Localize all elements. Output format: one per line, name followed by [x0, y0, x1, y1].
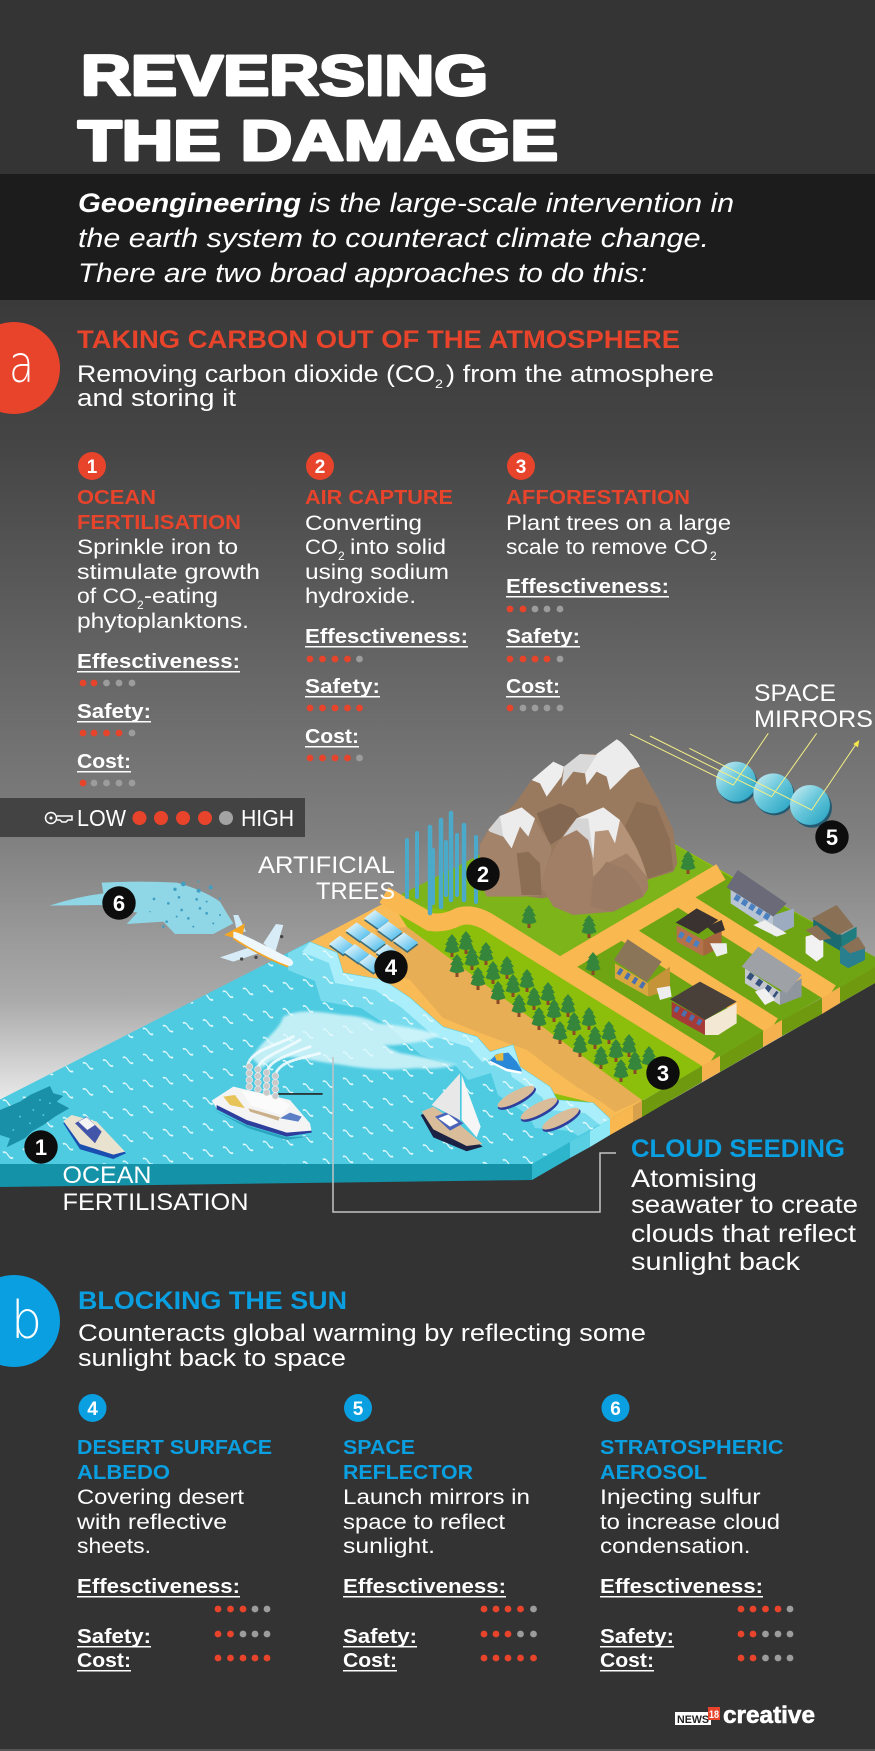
section a marker: [0, 322, 60, 414]
section a heading: Removing carbon dioxide (CO: [77, 361, 435, 388]
rating: effectiveness: [600, 1575, 793, 1612]
side faces: [532, 967, 875, 1180]
description: Injecting sulfur: [600, 1486, 761, 1509]
label: space mirrors: [754, 680, 873, 733]
jet ski: [489, 1053, 522, 1074]
badge 5: [344, 1394, 372, 1422]
rating: cost: [77, 750, 135, 786]
label: artificial trees: TREES: [316, 878, 395, 905]
illustration: space mirrors: [630, 733, 859, 828]
heading: STRATOSPHERIC: [600, 1436, 784, 1459]
section a heading: TAKING CARBON OUT OF THE ATMOSPHERE: [77, 326, 680, 354]
description: 2: [137, 598, 144, 612]
badge 5: 5: [353, 1399, 364, 1420]
illustration: forest: [444, 851, 696, 1082]
intro band: There are two broad approaches to do this:: [78, 258, 647, 288]
rating: cost: Cost:: [305, 725, 359, 748]
number badges on illustration: [24, 820, 849, 1164]
sand: [300, 900, 642, 1119]
logo: news18 creative: 18: [709, 1709, 719, 1721]
sailboat: [421, 1110, 483, 1151]
marker 4: 4: [385, 955, 398, 980]
panel: afforestation: [506, 452, 731, 711]
illustration: artificial trees: [407, 813, 476, 913]
mountain zone green: [390, 798, 721, 966]
label: artificial trees: [258, 852, 395, 905]
heading: [343, 1436, 473, 1484]
marker 5: 5: [826, 825, 838, 850]
rating: safety: [77, 1625, 270, 1648]
badge 6: 6: [610, 1399, 621, 1420]
rating: effectiveness: Effesctiveness:: [506, 575, 669, 598]
heading: DESERT SURFACE: [77, 1436, 272, 1459]
illustration: airplane: [220, 915, 293, 967]
house: yellow walls: [614, 939, 672, 1000]
darker sand strip: [375, 927, 642, 1112]
label: ocean fertilisation: FERTILISATION: [62, 1189, 248, 1216]
yacht: [63, 1117, 126, 1159]
badge 6: [602, 1394, 630, 1422]
logo: news18 creative: [675, 1702, 815, 1729]
isometric landscape base: [0, 798, 875, 1187]
description: of CO: [77, 585, 137, 608]
rating: safety: Safety:: [305, 675, 380, 698]
house: grey roof: [727, 870, 794, 937]
rating: effectiveness: Effesctiveness:: [77, 650, 240, 673]
rating: safety: [77, 700, 151, 736]
rating: effectiveness: Effesctiveness:: [600, 1575, 763, 1598]
logo: news18 creative: NEWS: [677, 1714, 709, 1726]
illustration: aerosol plume: [49, 881, 233, 934]
illustration: houses: [614, 870, 866, 1035]
description: space to reflect: [343, 1511, 505, 1534]
vapor trails: [248, 1037, 320, 1072]
land top surface: [0, 798, 875, 1164]
marker 1: [24, 1130, 58, 1164]
description: Covering desert: [77, 1486, 244, 1509]
ship shadow: [213, 1110, 312, 1140]
title: REVERSING: [81, 44, 488, 108]
rating: effectiveness: [77, 650, 240, 686]
section b heading: BLOCKING THE SUN: [78, 1287, 347, 1315]
description: Converting: [305, 512, 422, 535]
section b marker: b: [11, 1291, 42, 1351]
description: sunlight.: [343, 1535, 435, 1558]
intro band: is the large-scale intervention in: [309, 188, 734, 218]
house: red walls: [670, 982, 737, 1035]
badge 4: [78, 1394, 106, 1422]
section a heading: and storing it: [77, 385, 236, 412]
rating: effectiveness: Effesctiveness:: [343, 1575, 506, 1598]
rating: effectiveness: Effesctiveness:: [77, 1575, 240, 1598]
title: [78, 44, 558, 173]
description: using sodium: [305, 561, 449, 584]
panel: desert surface albedo: [76, 1394, 272, 1672]
description: hydroxide.: [305, 585, 416, 608]
rating: cost: Cost:: [600, 1649, 654, 1672]
rating: cost: Cost:: [77, 750, 131, 773]
legend: low to high: LOW: [77, 805, 126, 831]
rating: safety: Safety:: [77, 1625, 151, 1648]
rating: effectiveness: [77, 1575, 270, 1612]
marker 6: 6: [113, 891, 125, 916]
housing zone green: [561, 872, 875, 1061]
exhaust stacks: [246, 1063, 279, 1099]
description: to increase cloud: [600, 1511, 780, 1534]
heading: OCEAN: [77, 486, 156, 509]
heading: ALBEDO: [77, 1461, 170, 1484]
illustration: mountains: [479, 739, 677, 915]
marker 2: [466, 857, 500, 891]
marker 1: 1: [35, 1135, 47, 1160]
label: artificial trees: ARTIFICIAL: [258, 852, 395, 879]
rating: effectiveness: [506, 575, 669, 612]
description: condensation.: [600, 1535, 750, 1558]
description: -eating: [144, 585, 218, 608]
label: ocean fertilisation: [62, 1162, 248, 1216]
badge 2: [306, 452, 334, 480]
badge 3: [507, 452, 535, 480]
heading: AEROSOL: [600, 1461, 707, 1484]
heading: [600, 1436, 784, 1484]
description: phytoplanktons.: [77, 610, 249, 633]
section a heading: 2: [435, 377, 443, 391]
rating: safety: [600, 1625, 793, 1648]
ship hull: [212, 1087, 312, 1136]
section a marker: a: [9, 335, 34, 395]
rating: cost: Cost:: [506, 675, 560, 698]
marker 6: [102, 886, 136, 920]
shallow water: [288, 942, 610, 1136]
callout: cloud seeding: sunlight back: [631, 1248, 801, 1276]
marker 3: 3: [657, 1061, 669, 1086]
description: Sprinkle iron to: [77, 536, 238, 559]
title: THE DAMAGE: [78, 109, 558, 173]
label: space mirrors: MIRRORS: [754, 706, 873, 733]
badge 3: 3: [516, 457, 526, 478]
intro band: the earth system to counteract climate change.: [78, 223, 709, 253]
description: [77, 536, 260, 633]
panel: stratospheric aerosol: [600, 1394, 793, 1672]
badge 1: 1: [87, 457, 98, 478]
section a heading: ) from the atmosphere: [446, 361, 714, 388]
description: [76, 1486, 244, 1558]
callout: cloud seeding: clouds that reflect: [631, 1220, 856, 1248]
panel: ocean fertilisation: [77, 452, 260, 786]
rating: safety: [305, 675, 380, 711]
logo: news18 creative: creative: [723, 1702, 815, 1729]
heading: AFFORESTATION: [506, 486, 690, 509]
rating: cost: Cost:: [77, 1649, 131, 1672]
rating: cost: [343, 1649, 537, 1672]
illustration: desert albedo panels: [329, 910, 418, 975]
marker 4: [374, 950, 408, 984]
callout: cloud seeding: [631, 1135, 858, 1276]
description: with reflective: [76, 1511, 227, 1534]
heading: AIR CAPTURE: [305, 486, 453, 509]
heading: [77, 486, 241, 534]
legend: low to high: [0, 798, 305, 837]
description: sheets.: [77, 1535, 151, 1558]
label: space mirrors: SPACE: [754, 680, 836, 707]
description: [600, 1486, 780, 1558]
rating: cost: [305, 725, 363, 761]
label: ocean fertilisation: OCEAN: [62, 1162, 152, 1189]
rating: cost: [77, 1649, 270, 1672]
description: [506, 512, 731, 563]
badge 2: 2: [315, 457, 325, 478]
description: [305, 512, 449, 608]
heading: SPACE: [343, 1436, 415, 1459]
description: 2: [710, 549, 717, 563]
house: grey walls: [742, 947, 802, 1005]
cloud seeding connector: [333, 1057, 616, 1212]
panel: space reflector: [343, 1394, 537, 1672]
heading: [77, 1436, 272, 1484]
callout: cloud seeding: CLOUD SEEDING: [631, 1135, 845, 1163]
section b heading: sunlight back to space: [78, 1345, 346, 1372]
cloud plume: [252, 1011, 457, 1069]
badge 4: 4: [87, 1399, 98, 1420]
callout: cloud seeding: Atomising: [631, 1165, 757, 1193]
rating: effectiveness: [305, 625, 468, 662]
shoreline foam: [302, 942, 610, 1125]
heading: REFLECTOR: [343, 1461, 473, 1484]
rating: cost: Cost:: [343, 1649, 397, 1672]
illustration: iron fertilised patch: [0, 1086, 69, 1147]
wave texture: [0, 942, 610, 1164]
description: 2: [338, 549, 345, 563]
rowboats: [494, 1082, 539, 1114]
roads: [384, 872, 831, 1061]
legend: low to high: HIGH: [241, 805, 294, 831]
rating: safety: Safety:: [600, 1625, 674, 1648]
section b heading: Counteracts global warming by reflecting some: [78, 1320, 646, 1347]
description: scale to remove CO: [506, 536, 708, 559]
house: brown walls: [676, 908, 727, 957]
ocean: [0, 942, 610, 1164]
rating: safety: Safety:: [343, 1625, 417, 1648]
rating: safety: Safety:: [77, 700, 151, 723]
house: teal walls: [806, 905, 866, 968]
description: into solid: [350, 536, 446, 559]
intro band: [0, 174, 875, 300]
description: [343, 1486, 530, 1558]
description: Launch mirrors in: [343, 1486, 530, 1509]
intro band: Geoengineering: [78, 188, 302, 218]
panel: air capture: [305, 452, 468, 761]
badge 1: [78, 452, 106, 480]
front water face: [0, 1164, 532, 1187]
illustration: cloud seeding ship and clouds: [63, 1011, 583, 1159]
description: Plant trees on a large: [506, 512, 731, 535]
rating: effectiveness: [343, 1575, 537, 1612]
heading: FERTILISATION: [77, 511, 241, 534]
marker 5: [815, 820, 849, 854]
rating: safety: Safety:: [506, 625, 580, 648]
marker 2: 2: [477, 862, 489, 887]
section b marker: [0, 1275, 60, 1367]
description: stimulate growth: [77, 561, 260, 584]
rating: safety: [506, 625, 580, 662]
section a heading: [77, 326, 714, 412]
marker 3: [646, 1056, 680, 1090]
description: CO: [305, 536, 338, 559]
rating: effectiveness: Effesctiveness:: [305, 625, 468, 648]
rating: cost: [600, 1649, 793, 1672]
callout: cloud seeding: seawater to create: [631, 1191, 858, 1219]
section b heading: [78, 1287, 646, 1372]
rating: safety: [343, 1625, 537, 1648]
rating: cost: [506, 675, 563, 711]
